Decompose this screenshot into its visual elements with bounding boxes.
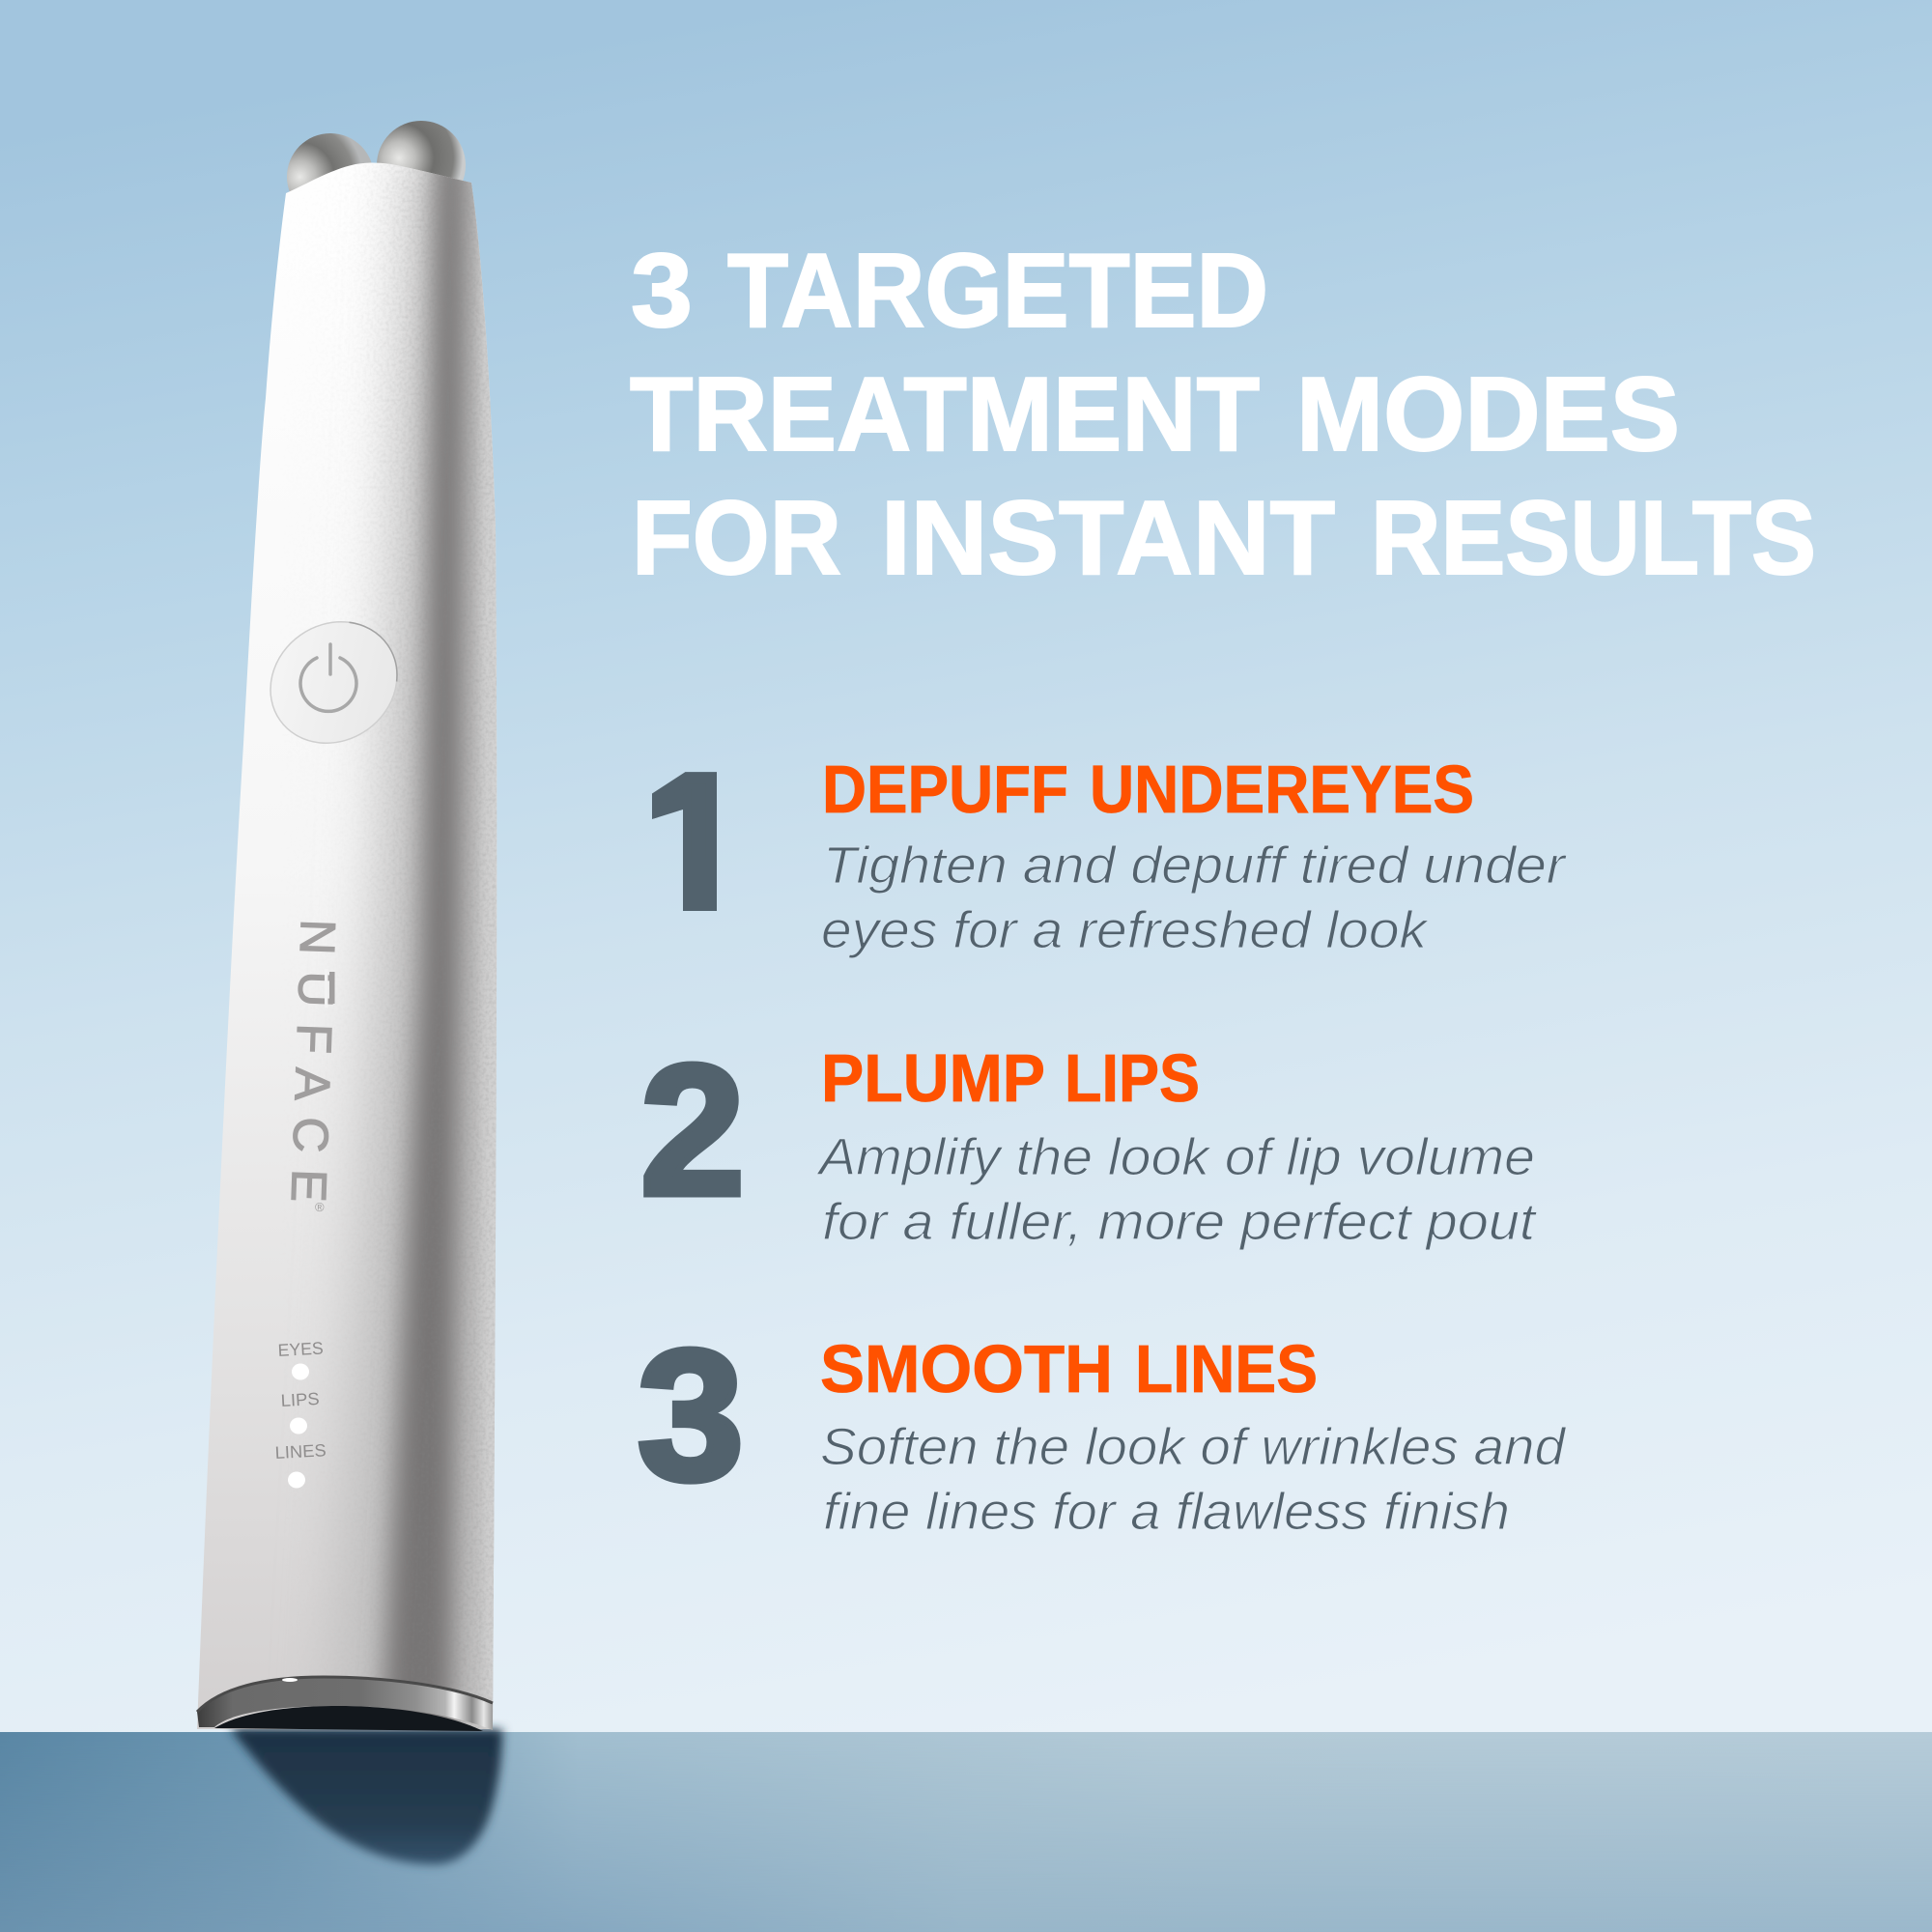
glass base ring <box>197 1677 493 1731</box>
heading: plump lips <box>821 1040 1200 1116</box>
icon: left roller ball <box>287 133 374 220</box>
number 2: 2 <box>640 1026 745 1234</box>
description: depuff undereyes: eyes for a refreshed look <box>821 901 1430 959</box>
icon: right roller ball <box>377 121 466 210</box>
heading: depuff undereyes: DEPUFF <box>822 752 1068 827</box>
heading: plump lips: LIPS <box>1065 1040 1200 1116</box>
brand wordmark NUFACE: NUFACE <box>281 919 346 1203</box>
description: smooth lines <box>820 1418 1567 1541</box>
brand wordmark NUFACE: ® <box>315 1200 325 1214</box>
power button <box>246 597 421 768</box>
title: MODES <box>1296 355 1680 473</box>
title <box>630 232 1816 597</box>
heading: smooth lines: SMOOTH <box>820 1331 1113 1406</box>
title: FOR <box>632 479 841 597</box>
description: depuff undereyes <box>821 837 1567 959</box>
wand body <box>197 162 497 1729</box>
mode indicator: EYES: EYES <box>277 1339 324 1360</box>
mode 3: smooth lines <box>638 1311 1567 1541</box>
mode indicator: LINES: LINES <box>274 1440 327 1463</box>
heading: smooth lines <box>820 1331 1318 1406</box>
heading: smooth lines: LINES <box>1135 1331 1318 1406</box>
description: smooth lines: fine lines for a flawless finish <box>823 1483 1510 1541</box>
description: plump lips: Amplify the look of lip volume <box>816 1128 1535 1186</box>
heading: depuff undereyes: UNDEREYES <box>1090 752 1474 827</box>
heading: depuff undereyes <box>822 752 1474 827</box>
heading: plump lips: PLUMP <box>821 1040 1045 1116</box>
title: TREATMENT <box>630 355 1260 473</box>
description: plump lips: for a fuller, more perfect pout <box>822 1193 1537 1251</box>
icon: power symbol <box>300 644 356 711</box>
mode indicator: EYES <box>277 1339 324 1379</box>
mode 2: plump lips <box>640 1026 1537 1251</box>
floor surface <box>0 1732 1932 1932</box>
description: smooth lines: Soften the look of wrinkles and <box>820 1418 1567 1476</box>
mode indicator: LINES <box>274 1440 327 1488</box>
device shadow on floor <box>230 1728 502 1864</box>
number 3: 3 <box>638 1311 744 1519</box>
number 1: 1 <box>641 737 747 949</box>
title: INSTANT <box>881 479 1335 597</box>
title: 3 <box>631 232 693 350</box>
description: plump lips <box>816 1128 1537 1251</box>
mode indicator: LIPS: LIPS <box>280 1389 320 1410</box>
title: TARGETED <box>727 232 1268 350</box>
mode indicator: LIPS <box>280 1389 320 1434</box>
description: depuff undereyes: Tighten and depuff tired under <box>823 837 1567 895</box>
mode 1: depuff undereyes <box>652 765 1567 958</box>
device: facial wand <box>196 121 497 1731</box>
title: RESULTS <box>1371 479 1816 597</box>
